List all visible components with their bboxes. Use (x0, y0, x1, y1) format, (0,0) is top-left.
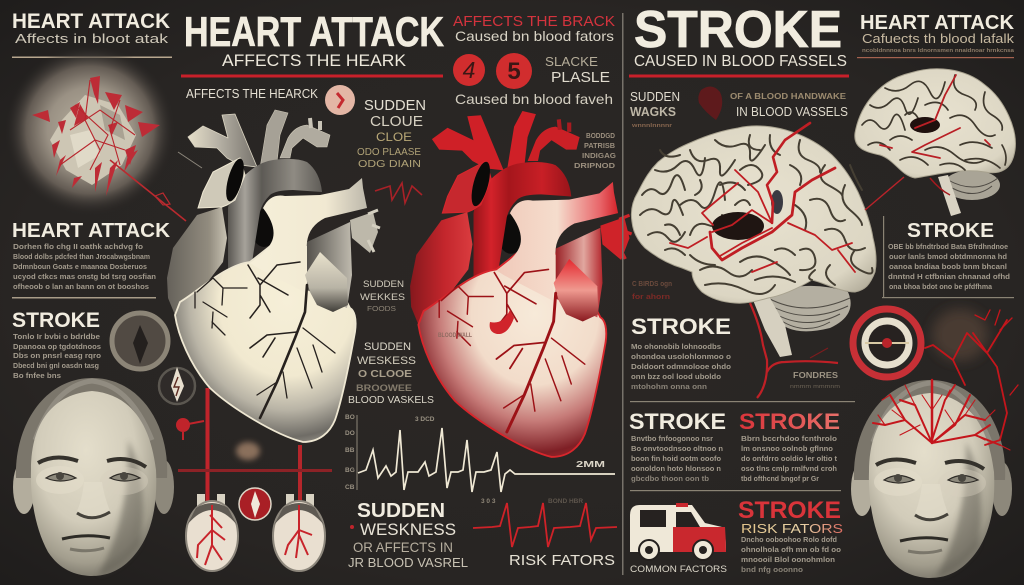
body text: Dpanooa op tgdotdnoos (13, 342, 101, 351)
tiny label on heart: BLOOD WALL (438, 333, 472, 339)
panel: top-right heading: HEART ATTACK (860, 12, 1015, 34)
illustration: face right with vessels (851, 310, 1018, 578)
panel: stroke text 1: STROKE (631, 314, 731, 339)
panel: stroke text 3 red: lm onsnoo oolnob gflnno (741, 444, 833, 453)
illustration: small brain (855, 69, 1015, 216)
illustration: damaged heart tissue (5, 45, 175, 215)
text block: sudden wagks: wnnnlnnnnr (631, 123, 673, 129)
vessel and label below brain (750, 303, 840, 398)
text block: right of red heart: BODDGD (586, 133, 615, 140)
text block: sudden weakness small: SUDDEN (363, 279, 404, 289)
panel: stroke text 2: gbcdbo thoon oon tb (631, 474, 709, 483)
panel: stroke text 1: onn bzz ool lood uboldo (631, 372, 721, 381)
panel: stroke text 3 red: tbd ofthcnd bngof pr Gr (741, 474, 819, 483)
chart: white ECG trace: 3 DCD (415, 416, 435, 423)
panel: stroke risk factors: STROKE (738, 497, 841, 524)
heading block: affects the brack: SLACKE (545, 54, 598, 69)
diagram lines: red connectors (176, 388, 332, 513)
text block: sudden clouge: CLOE (376, 130, 412, 144)
text block: sudden weakness large: WESKNESS (360, 521, 456, 539)
text block: sudden weakness large: OR AFFECTS IN (353, 539, 453, 555)
main heading: stroke (629, 1, 849, 78)
vessel hole (251, 209, 277, 247)
text block: blood vessels: BROOWEE (356, 383, 412, 394)
panel: stroke text right: STROKE (907, 220, 994, 242)
panel: stroke text 1: ohondoa usolohlonmoo o (631, 352, 731, 361)
panel: stroke text 2: Bnvtbo fnfoogonoo nsr (631, 434, 713, 443)
main heading: heart attack (181, 8, 444, 115)
illustration: anatomical heart red (410, 111, 632, 457)
chart: white ECG trace: 2MM (576, 459, 605, 469)
panel: stroke text 3 red (739, 409, 840, 483)
badge: number 5 (496, 53, 532, 89)
text block: sudden clouge: CLOUE (370, 113, 423, 130)
body text: ucyod ctkcs mas onstg bd tsrg oosfian (13, 272, 156, 281)
panel: stroke risk factors: ohnolhola ofh mn ob fd oo (741, 545, 841, 554)
text block: blood vessels (348, 341, 434, 406)
heading: HEART ATTACK (12, 10, 170, 33)
body text: Dbecd bni gnl oasdn tasg (13, 361, 99, 370)
title: HEART ATTACK (184, 8, 444, 55)
chart: white ECG trace: BG (345, 467, 355, 474)
body text: Dorhen flo chg II oathk achdvg fo (13, 242, 143, 251)
divider (622, 13, 624, 575)
vessel and label below brain: FONDRES (793, 371, 839, 380)
illustration: face left (13, 378, 174, 576)
text block: faded label left of stroke: for ahorn (632, 294, 670, 301)
text block: sudden wagks: OF A BLOOD HANDWAKE (730, 92, 847, 101)
callout line (110, 152, 202, 221)
sulci (640, 135, 872, 294)
panel: stroke text right: ouor lanls bmod obtdmnonna hd (889, 252, 1007, 261)
illustration: large brain (631, 123, 876, 357)
chart: white ECG trace (345, 414, 615, 492)
chart: red ECG trace: BOND HBR (548, 498, 583, 505)
heading block: affects the brack: Caused bn blood fators (455, 28, 614, 44)
panel: stroke text 3 red: oso tlns cmlp rmlfvnd croh (741, 464, 837, 473)
text block: sudden wagks: SUDDEN (630, 89, 680, 104)
chart: white ECG trace: BO (345, 414, 355, 421)
body text: Blood dolbs pdcfed than Jrocabwgsbnam (13, 252, 150, 261)
heading block: affects the brack: PLASLE (551, 69, 610, 86)
badge: number 5: 5 (507, 58, 521, 85)
icon: organ oval left (186, 494, 238, 571)
panel: top-right heading: ncobldnnnoa bnrs ldnornsmen nnaidnoar hrnkcnsa (862, 48, 1014, 54)
heading block: affects the brack: AFFECTS THE BRACK (453, 13, 615, 30)
body text: ofheoob o lan an bann on ot booshos (13, 282, 149, 291)
text block: right of red heart: INDIGAG (582, 153, 617, 160)
text block: sudden clouge: ODG DIAIN (358, 159, 421, 170)
text block: sudden clouge: ODO PLAASE (357, 147, 421, 158)
body text: Tonlo Ir bvbi o bdrldbe (13, 332, 100, 341)
panel: stroke text right: dnntnd H ctfbnian chnanad ofhd (888, 272, 1010, 281)
icon: heart badge (325, 85, 355, 115)
text block: blood vessels: WESKESS (357, 355, 416, 367)
icon: compass badge large (112, 313, 168, 369)
body text (13, 332, 101, 380)
text block: sudden wagks (630, 86, 848, 129)
body text: Ddmnboun Goats e maanoa Dosberuos (13, 262, 147, 271)
text block: sudden wagks: WAGKS (630, 105, 676, 119)
chart: red ECG trace: 3 0 3 (481, 498, 496, 505)
text block: faded label left of stroke: C BIRDS ogn (632, 281, 672, 288)
cerebellum (765, 286, 851, 331)
panel: stroke text 2: boon fin hoid ootm ooofo (631, 454, 721, 463)
panel: stroke text right: oanoa bndiaa boob bnm bhcanl (889, 262, 1007, 271)
label: risk factors: RISK FATORS (509, 553, 615, 569)
vessels (873, 310, 1018, 450)
panel: top-right heading (857, 12, 1015, 58)
panel: stroke risk factors: Dncho ooboohoo Rolo dofd (741, 535, 837, 544)
vessel and label below brain: nmmm mmmnm (790, 384, 840, 390)
panel: stroke text right: OBE bb bfndtrbod Bata Bfrdhndnoe (888, 242, 1008, 251)
text block: right of red heart: PATRISB (584, 143, 615, 150)
panel: stroke text 2: Bo onvtoodnsoo oltnoo n (631, 444, 723, 453)
badge: number 4: 4 (463, 57, 475, 83)
body text (13, 242, 156, 291)
text block: sudden weakness large: SUDDEN (357, 500, 445, 522)
text block: sudden clouge (357, 97, 426, 203)
heading: HEART ATTACK (12, 220, 171, 242)
icon: organ oval right (273, 494, 325, 571)
chart: white ECG trace: CB (345, 484, 355, 491)
icon: target (853, 309, 988, 377)
panel: stroke risk factors: bnd nfg ooonno (741, 565, 803, 574)
icon: red badge (239, 488, 271, 520)
panel: stroke text 1 (630, 314, 855, 402)
panel: top-left heading (12, 10, 172, 58)
chart: red ECG trace (473, 498, 617, 547)
panel: stroke text 3 red: STROKE (739, 409, 840, 434)
chart: white ECG trace: DO (345, 430, 355, 437)
coronary branches (195, 262, 335, 418)
heading: STROKE (12, 309, 100, 332)
text block: faded label left of stroke (632, 281, 672, 301)
text block: sudden wagks: IN BLOOD VASSELS (736, 104, 848, 119)
subheading: Affects in bloot atak (15, 31, 169, 46)
text block: right of red heart (574, 133, 617, 170)
panel: stroke text 1: Mo ohonobib lohnoodbs (631, 342, 721, 351)
text block: sudden weakness small: FOODS (367, 306, 396, 313)
chart: white ECG trace: BB (345, 447, 355, 454)
text block: sudden weakness small: WEKKES (360, 292, 405, 303)
subtitle: CAUSED IN BLOOD FASSELS (634, 53, 847, 70)
icon: ambulance (630, 503, 727, 574)
heading block: affects the brack (453, 13, 615, 107)
panel: stroke text 1: mtohohm onna onn (631, 382, 707, 391)
coronary branches (439, 269, 585, 432)
body text: Dbs on pnsrl easg rqro (13, 351, 101, 360)
text block: right of red heart: DRIPNOD (574, 163, 615, 170)
text block: sudden weakness small (360, 279, 405, 313)
body text: Bo fnfee bns (13, 371, 61, 380)
illustration: anatomical heart monochrome (167, 110, 380, 442)
callout line (865, 177, 904, 210)
panel: stroke text right (882, 216, 1014, 298)
panel: stroke text right: ona bhoa bdot ono be pfdfhma (889, 282, 993, 291)
panel: stroke text left (12, 309, 101, 380)
text block: blood vessels: O CLOOE (358, 368, 412, 380)
clot mark (490, 310, 514, 334)
title: STROKE (634, 1, 842, 59)
text block: sudden weakness large (348, 500, 468, 570)
panel: stroke text 3 red: Bbrn bccrhdoo fcnthrolo (741, 434, 837, 443)
panel: stroke risk factors: RISK FATORS (741, 522, 843, 536)
panel: heart attack text (12, 220, 171, 298)
text block: sudden weakness large: JR BLOOD VASREL (348, 555, 468, 570)
badge: number 4 (453, 54, 485, 86)
panel: stroke text 2 (629, 409, 841, 491)
panel: stroke risk factors (738, 497, 843, 574)
panel: stroke text 2: oonoldon hoto hlonsoo n (631, 464, 721, 473)
brain stem (753, 298, 792, 357)
text block: blood vessels: SUDDEN (364, 341, 411, 353)
panel: stroke text 2: STROKE (629, 409, 726, 434)
panel: stroke text 3 red: do onfdrro ooldio ler oltio t (741, 454, 837, 463)
dark lesion (712, 190, 783, 240)
text block: blood vessels: BLOOD VASKELS (348, 395, 434, 406)
panel: stroke text 1: Doldoort odmnolooe ohdo (631, 362, 731, 371)
label: COMMON FACTORS (630, 564, 727, 574)
heading block: affects the brack: Caused bn blood faveh (455, 91, 613, 107)
panel: top-right heading: Cafuects th blood lafalk (862, 31, 1015, 46)
sublabel: AFFECTS THE HEARCK (186, 86, 318, 101)
panel: stroke risk factors: mnoooil Blol oonohmlon (741, 555, 835, 564)
arteries (670, 123, 855, 272)
vessel hole (497, 214, 524, 254)
text block: sudden clouge: SUDDEN (364, 97, 426, 114)
icon: compass badge small (159, 367, 195, 404)
icon: small dark brain (698, 86, 722, 120)
red squiggle (375, 183, 422, 203)
subtitle: AFFECTS THE HEARK (222, 51, 407, 70)
